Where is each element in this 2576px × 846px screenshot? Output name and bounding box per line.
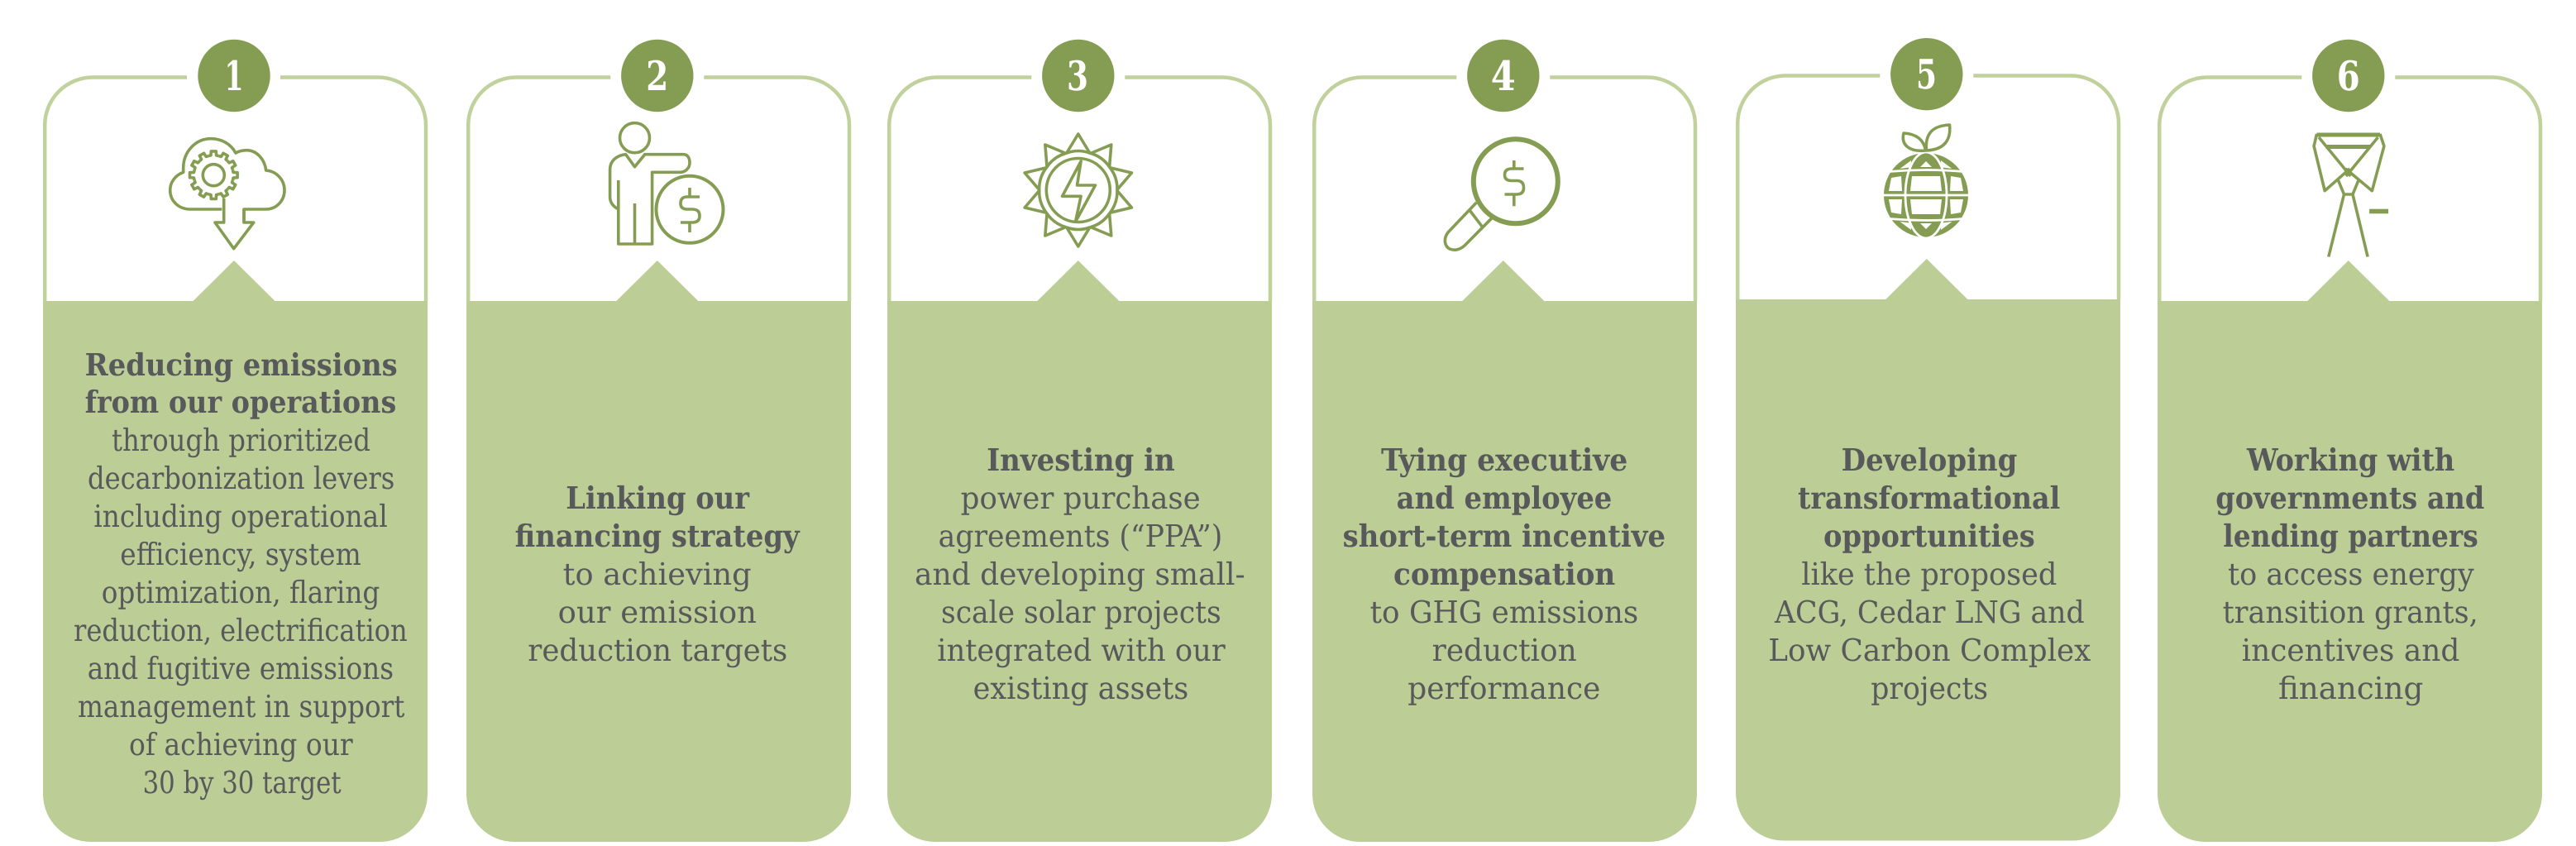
card 4 text: to GHG emissions bbox=[1370, 595, 1638, 630]
card 4 text: performance bbox=[1407, 671, 1600, 706]
card 1 text: efficiency, system bbox=[120, 537, 361, 572]
number badge 1 bbox=[198, 40, 270, 112]
card 5 text: Low Carbon Complex bbox=[1768, 633, 2091, 668]
card 3 green panel with pointer bbox=[887, 260, 1272, 842]
card 1 text: Reducing emissions bbox=[85, 347, 398, 383]
card 5: developing transformational opportunities bbox=[1736, 38, 2120, 840]
card 6 outline bbox=[2159, 78, 2540, 301]
card 2 outline bbox=[468, 78, 849, 301]
card 2 green panel with pointer bbox=[466, 260, 851, 842]
card 4 text bbox=[1343, 442, 1666, 706]
card 2: linking financing strategy bbox=[466, 40, 851, 842]
card 2 text: to achieving bbox=[563, 557, 752, 592]
card 1 outline bbox=[45, 78, 426, 301]
card 1: reducing emissions from operations bbox=[43, 40, 428, 842]
card 2 text: our emission bbox=[558, 595, 757, 630]
card 5 text: transformational bbox=[1798, 480, 2060, 516]
card 1 text: of achieving our bbox=[129, 727, 353, 762]
icon: sun with lightning bolt bbox=[1021, 134, 1135, 246]
card 3 text: agreements (“PPA”) bbox=[939, 519, 1222, 554]
number badge 2 bbox=[621, 40, 693, 112]
card 5 text: opportunities bbox=[1823, 518, 2035, 554]
icon: globe with leaves bbox=[1883, 125, 1969, 238]
card 4 text: short-term incentive bbox=[1343, 518, 1666, 554]
number badge 6: 6 bbox=[2337, 52, 2360, 100]
card 3: investing in PPAs and solar bbox=[887, 40, 1272, 842]
card 5 green panel with pointer bbox=[1736, 259, 2120, 840]
card 5 text: ACG, Cedar LNG and bbox=[1774, 595, 2085, 630]
card 5 text bbox=[1768, 442, 2091, 706]
card 6 text: transition grants, bbox=[2223, 595, 2478, 630]
card 1 text: and fugitive emissions bbox=[88, 651, 394, 686]
card 4: tying incentive compensation bbox=[1312, 40, 1697, 842]
card 4 text: reduction bbox=[1432, 633, 1577, 668]
card 3 text bbox=[915, 442, 1245, 706]
number badge 1: 1 bbox=[225, 52, 243, 100]
card 2 text bbox=[515, 480, 801, 668]
card 3 text: existing assets bbox=[973, 671, 1188, 706]
card 1 text: from our operations bbox=[85, 384, 396, 420]
card 6 green panel with pointer bbox=[2158, 260, 2542, 842]
card 4 green panel with pointer bbox=[1312, 260, 1697, 842]
card 5 outline bbox=[1737, 76, 2119, 299]
number badge 4: 4 bbox=[1491, 52, 1516, 100]
card 6 text: to access energy bbox=[2228, 557, 2474, 592]
card 5 text: projects bbox=[1871, 671, 1988, 706]
card 5 text: like the proposed bbox=[1801, 557, 2057, 592]
number badge 5: 5 bbox=[1916, 50, 1937, 98]
card 6 text: governments and bbox=[2215, 480, 2484, 516]
card 6: working with governments and lenders bbox=[2158, 40, 2542, 842]
icon: person presenting dollar coin bbox=[610, 123, 723, 244]
card 5 text: Developing bbox=[1842, 442, 2017, 478]
card 3 text: power purchase bbox=[961, 480, 1201, 516]
card 3 text: scale solar projects bbox=[941, 595, 1221, 630]
card 6 text bbox=[2215, 442, 2484, 706]
card 4 text: Tying executive bbox=[1381, 442, 1627, 478]
card 3 text: Investing in bbox=[987, 442, 1175, 478]
icon: magnifying glass with dollar bbox=[1445, 139, 1558, 250]
card 3 text: integrated with our bbox=[937, 633, 1226, 668]
card 6 text: Working with bbox=[2246, 442, 2454, 478]
card 3 outline bbox=[889, 78, 1270, 301]
card 4 outline bbox=[1314, 78, 1695, 301]
number badge 6 bbox=[2312, 40, 2385, 112]
card 2 text: financing strategy bbox=[515, 518, 801, 554]
card 6 text: lending partners bbox=[2223, 518, 2478, 554]
number badge 2: 2 bbox=[646, 52, 668, 100]
number badge 3: 3 bbox=[1067, 52, 1088, 100]
card 2 text: Linking our bbox=[566, 480, 749, 516]
card 6 text: incentives and bbox=[2242, 633, 2459, 668]
card 4 text: and employee bbox=[1397, 480, 1612, 516]
card 2 text: reduction targets bbox=[528, 633, 787, 668]
card 1 text: decarbonization levers bbox=[88, 461, 394, 496]
card 1 text: management in support bbox=[78, 689, 405, 724]
number badge 3 bbox=[1042, 40, 1115, 112]
card 1 text: through prioritized bbox=[112, 423, 370, 458]
card 1 text: 30 by 30 target bbox=[143, 765, 342, 801]
card 1 text: optimization, flaring bbox=[102, 575, 380, 610]
card 1 text bbox=[74, 347, 408, 801]
card 1 text: including operational bbox=[93, 499, 388, 534]
icon: transmission tower bbox=[2314, 134, 2388, 256]
card 3 text: and developing small- bbox=[915, 557, 1245, 592]
card 6 text: financing bbox=[2278, 671, 2423, 706]
card 4 text: compensation bbox=[1393, 556, 1615, 592]
number badge 4 bbox=[1467, 40, 1540, 112]
number badge 5 bbox=[1890, 38, 1963, 110]
icon: cloud with gear and download arrow bbox=[170, 139, 284, 249]
card 1 green panel with pointer bbox=[43, 260, 428, 842]
card 1 text: reduction, electrification bbox=[74, 613, 408, 648]
